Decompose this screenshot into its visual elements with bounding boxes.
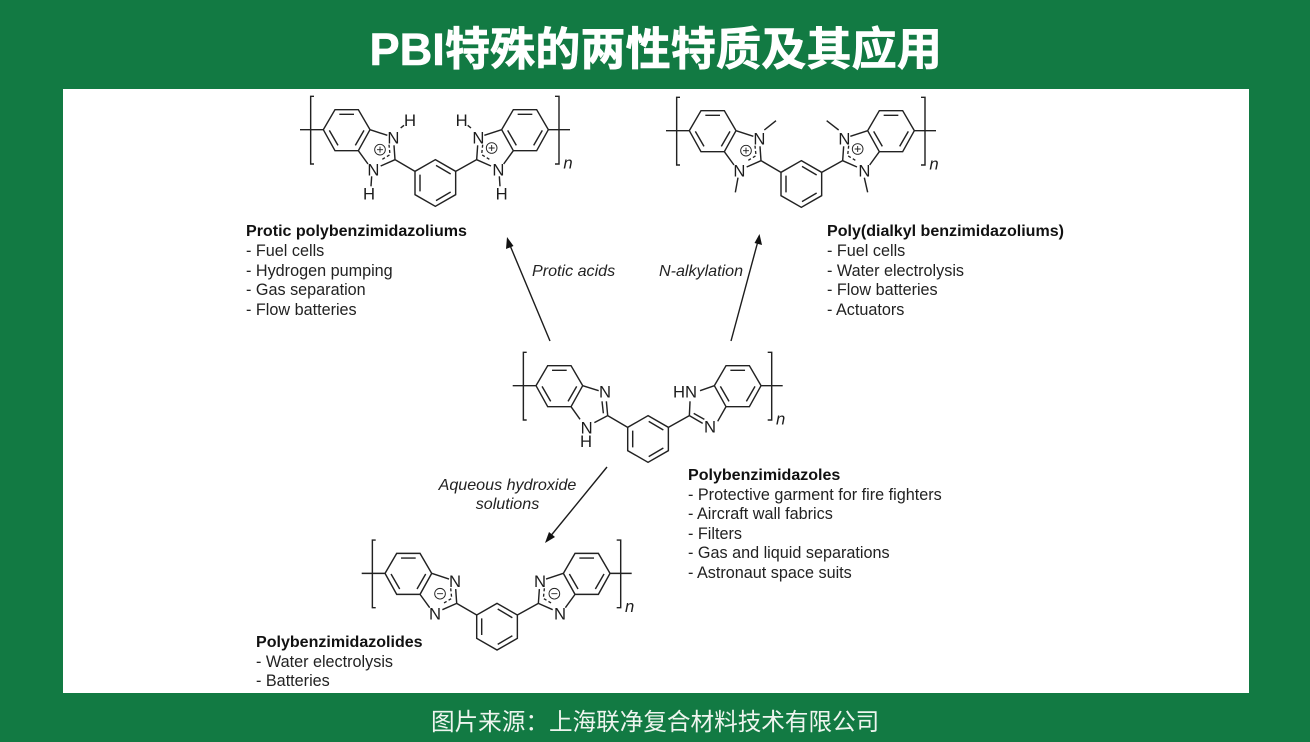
text block: poly(dialkyl benzimidazoliums) (827, 222, 1064, 319)
structure: polybenzimidazolide (362, 540, 634, 650)
structure: polybenzimidazolide: N (449, 572, 461, 591)
structure: polybenzimidazolide: N (534, 572, 546, 591)
structure: protic polybenzimidazolium: H (363, 184, 375, 203)
text block: polybenzimidazolides: - Water electrolysis (256, 653, 393, 671)
text block: poly(dialkyl benzimidazoliums): - Fuel cells (827, 242, 905, 260)
structure: poly(dialkyl benzimidazolium): N (753, 129, 765, 148)
text block: poly(dialkyl benzimidazoliums): - Flow batteries (827, 281, 938, 299)
structure: polybenzimidazolide: N (554, 604, 566, 623)
text block: polybenzimidazolides (256, 633, 423, 690)
label: Aqueous hydroxide solutions (438, 476, 576, 513)
structure: polybenzimidazole: n (776, 409, 785, 428)
text block: poly(dialkyl benzimidazoliums): - Water electrolysis (827, 262, 964, 280)
arrow: protic acids (506, 237, 550, 341)
structure: protic polybenzimidazolium: N (472, 128, 484, 147)
structure: polybenzimidazolide: N (429, 604, 441, 623)
structure: protic polybenzimidazolium: N (387, 128, 399, 147)
structure: poly(dialkyl benzimidazolium): N (733, 162, 745, 181)
text block: polybenzimidazoles: - Filters (688, 525, 742, 543)
structure: protic polybenzimidazolium (300, 96, 573, 206)
text block: poly(dialkyl benzimidazoliums): Poly(dialkyl benzimidazoliums) (827, 222, 1064, 240)
structure: protic polybenzimidazolium: N (492, 161, 504, 180)
text block: polybenzimidazoles: Polybenzimidazoles (688, 466, 840, 484)
text block: polybenzimidazoles (688, 466, 942, 582)
label: Protic acids: Protic acids (532, 262, 615, 280)
footer: image source: 图片来源：上海联净复合材料技术有限公司 (431, 709, 879, 736)
text block: protic polybenzimidazoliums: - Gas separation (246, 281, 366, 299)
structure: protic polybenzimidazolium: N (367, 161, 379, 180)
structure: polybenzimidazole: N (599, 383, 611, 402)
structure: protic polybenzimidazolium: H (404, 111, 416, 130)
structure: poly(dialkyl benzimidazolium): N (838, 129, 850, 148)
arrow: aqueous hydroxide (545, 467, 607, 543)
text block: polybenzimidazolides: - Batteries (256, 672, 330, 690)
structure: polybenzimidazole: H (580, 432, 592, 451)
structure: polybenzimidazole (513, 352, 785, 462)
structure: protic polybenzimidazolium: H (456, 111, 468, 130)
structure: polybenzimidazolide: n (625, 597, 634, 616)
structure: poly(dialkyl benzimidazolium) (666, 97, 939, 207)
text block: protic polybenzimidazoliums (246, 222, 467, 319)
text block: protic polybenzimidazoliums: - Fuel cells (246, 242, 324, 260)
text block: poly(dialkyl benzimidazoliums): - Actuators (827, 301, 904, 319)
label: Aqueous hydroxide solutions: Aqueous hydroxide (438, 476, 576, 494)
text block: polybenzimidazoles: - Protective garment for fire fighters (688, 486, 942, 504)
structure: protic polybenzimidazolium: H (496, 184, 508, 203)
structure: protic polybenzimidazolium: n (563, 153, 573, 172)
structure: poly(dialkyl benzimidazolium): N (858, 162, 870, 181)
structure: polybenzimidazole: N (704, 417, 716, 436)
text block: protic polybenzimidazoliums: - Hydrogen pumping (246, 262, 393, 280)
text block: polybenzimidazolides: Polybenzimidazolides (256, 633, 423, 651)
text block: polybenzimidazoles: - Aircraft wall fabrics (688, 505, 833, 523)
structure: polybenzimidazole: N (581, 418, 593, 437)
structure: poly(dialkyl benzimidazolium): n (929, 154, 939, 173)
text block: protic polybenzimidazoliums: - Flow batteries (246, 301, 357, 319)
structure: polybenzimidazole: HN (673, 383, 697, 402)
label: N-alkylation: N-alkylation (659, 262, 743, 280)
panel: white diagram area (63, 89, 1249, 693)
text block: polybenzimidazoles: - Gas and liquid separations (688, 544, 890, 562)
arrow: N-alkylation (731, 234, 762, 341)
title: PBI特殊的两性特质及其应用 (370, 24, 942, 75)
label: Aqueous hydroxide solutions: solutions (476, 495, 539, 513)
text block: protic polybenzimidazoliums: Protic polybenzimidazoliums (246, 222, 467, 240)
text block: polybenzimidazoles: - Astronaut space suits (688, 564, 852, 582)
